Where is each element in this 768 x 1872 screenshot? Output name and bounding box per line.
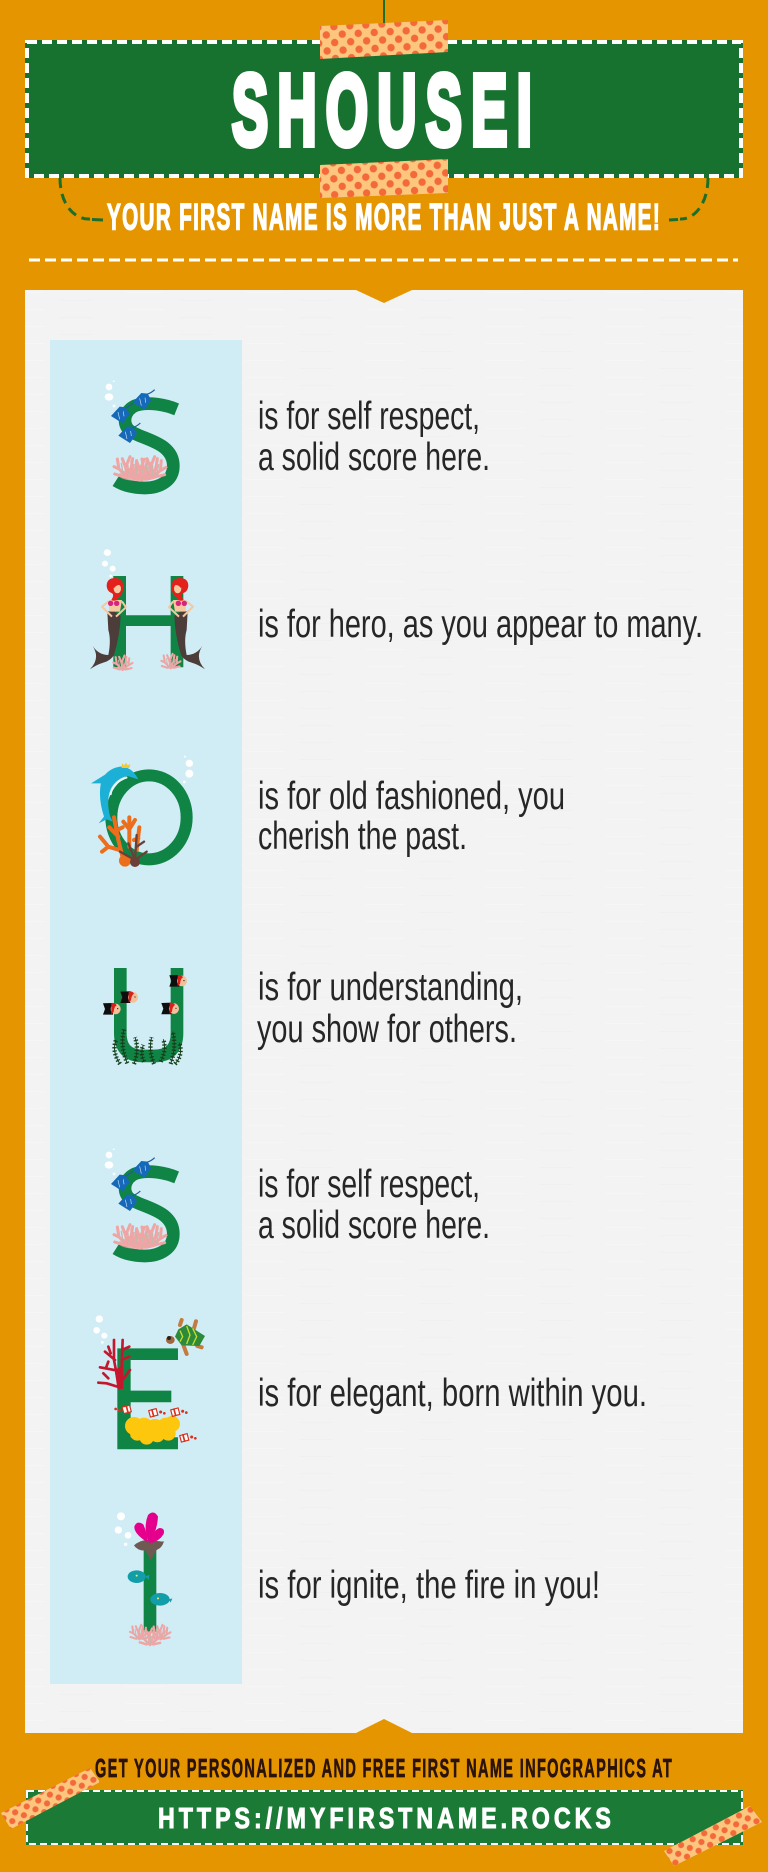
text: I meaning: is for ignite, the fire in you!: [258, 1564, 600, 1607]
header banner: [25, 40, 743, 178]
text: E meaning: is for elegant, born within you.: [258, 1372, 647, 1415]
text: U meaning: you show for others.: [257, 1008, 517, 1051]
text: O meaning: [258, 775, 565, 858]
text: second S meaning: is for self respect,: [258, 1163, 480, 1206]
tagline: YOUR FIRST NAME IS MORE THAN JUST A NAME!: [107, 197, 660, 238]
letter E: [93, 1315, 205, 1449]
tape: bottom: [320, 159, 448, 198]
gold coral: [125, 1416, 180, 1445]
text: second S meaning: [258, 1163, 490, 1247]
tape: footer left: [1, 1768, 100, 1829]
text: S meaning: is for self respect,: [258, 395, 480, 438]
turtle: [166, 1320, 205, 1354]
letter H: [90, 549, 205, 670]
text: O meaning: is for old fashioned, you: [258, 775, 565, 818]
text: S meaning: a solid score here.: [258, 436, 490, 479]
panel: paper: [25, 290, 743, 1733]
panel: light blue letter column: [50, 340, 242, 1684]
text: U meaning: [257, 966, 523, 1051]
tape: top: [320, 20, 448, 59]
letter S (second): [105, 1148, 177, 1256]
letter I: [115, 1512, 172, 1645]
text: second S meaning: a solid score here.: [258, 1204, 490, 1247]
footer url: HTTPS://MYFIRSTNAME.ROCKS: [158, 1801, 611, 1835]
title: SHOUSEI: [232, 55, 532, 167]
text: S meaning: [258, 395, 490, 479]
text: O meaning: cherish the past.: [258, 815, 467, 858]
letter O: [91, 756, 193, 867]
footer banner: [26, 1790, 743, 1845]
letter U: [103, 968, 187, 1064]
tape: footer right: [664, 1806, 762, 1866]
bracket curves: [60, 178, 708, 220]
header hanging line: [383, 0, 385, 24]
letter S: [105, 380, 177, 488]
text: U meaning: is for understanding,: [258, 966, 523, 1009]
footer call to action: GET YOUR PERSONALIZED AND FREE FIRST NAME INFOGRAPHICS AT: [95, 1755, 672, 1783]
